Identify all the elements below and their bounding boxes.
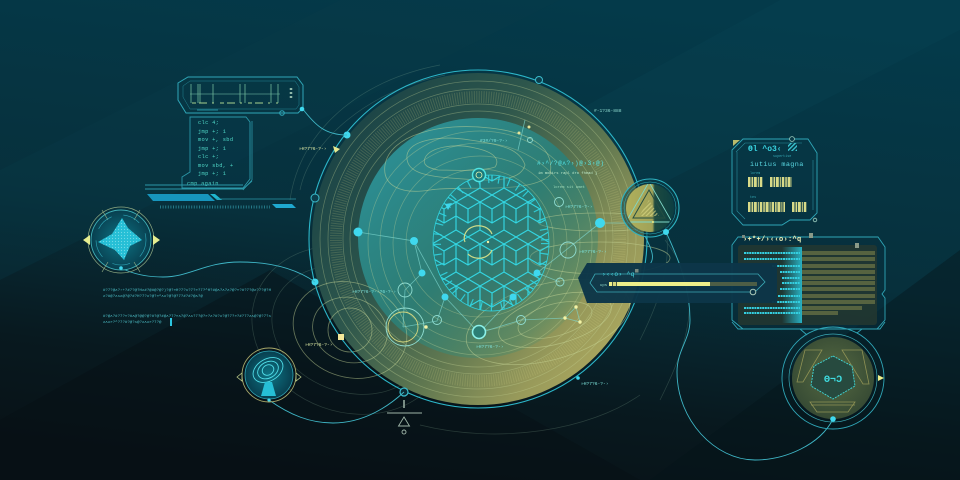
annotation labels on globe: »H?7?6-?-› [299, 146, 327, 152]
panel: barcode card: Ɵl ^o3‹ [748, 145, 782, 154]
annotation labels on globe: #›^/?@ʌ?›)@›3›@) [537, 160, 604, 167]
text block: left description: #?@ʌ?#?7?»?#ʌ@?@@?@?#?@?#@ʌ?7?»ʌ?@?ʌʌ?7?@?»?ʌ?#?ʌ?@?7?»?#?7?ʌʌ@?@?7?ʌ [103, 314, 272, 319]
contour blobs [279, 127, 670, 394]
text block: left description: ʌʌʌ»?^?7?#?@?ʌ@?ʌʌʌ»?7?@ [103, 320, 162, 325]
icon: hex badge dial: Θ¬Ɔ [824, 375, 842, 386]
code text: clc 4; [198, 120, 219, 126]
annotation labels on globe: »H?7?6-?-›?6-?-› [352, 289, 396, 295]
panel: status progress bar: ups [600, 284, 608, 288]
bar code chart [191, 84, 278, 110]
panel: barcode card [732, 137, 817, 225]
code text: clc +; [198, 154, 219, 160]
panel: top-left data chart [178, 77, 304, 115]
annotation labels on globe: lorem sit amet [553, 185, 585, 190]
annotation labels on globe: #3#/?9-?-› [480, 138, 508, 144]
code text: jmp +; 1 [198, 146, 226, 152]
ring nodes [311, 76, 580, 396]
network links [358, 120, 650, 333]
icon: radar dish gauge [237, 348, 301, 402]
outer contour lines behind the globe [228, 65, 689, 441]
panel: status progress bar [578, 263, 777, 303]
outer cyan ring [309, 70, 647, 408]
panel: barcode card: tes [750, 196, 756, 200]
code text: mov sbd, + [198, 163, 233, 169]
text block: left description [103, 288, 272, 326]
connector curves [121, 108, 833, 460]
icon: wireframe diamond gauge [83, 207, 160, 273]
text block: left description: #?7?@ʌ?›+?#7?@?Hʌ#?@#@?@?)?@?»H?7?ʌ?7?»?7?^H?#@ʌ?ʌ?ʌ?@?»?#?7?@ʌ?7?@?H [103, 288, 272, 293]
ridge hatch ring [336, 97, 620, 381]
cyan rows [744, 253, 800, 313]
panel: code listing [182, 117, 252, 190]
progress fill [617, 282, 710, 286]
panel: barcode card: lorem [750, 171, 760, 176]
code text: cmp again [187, 181, 219, 187]
progress track [609, 282, 757, 286]
panel: status progress bar: ›‹‹o› ^q [602, 271, 635, 278]
panel: data stream: ›+*+/›‹‹o›:^q [743, 235, 802, 244]
annotation labels on globe: #-1?36-888 [594, 108, 622, 114]
triangle badge [621, 179, 679, 237]
annotation labels on globe: »H?7?6-?-› [581, 381, 609, 387]
annotation labels on globe: »H?7?6-?-› [476, 344, 504, 350]
annotation labels on globe: »H?7?6-?-› [579, 249, 607, 255]
annotation labels on globe [299, 108, 622, 387]
olive rows [802, 251, 875, 315]
geodesic sphere [433, 175, 549, 311]
code text: jmp +; 1 [198, 171, 226, 177]
code text [187, 120, 233, 187]
icon: hex badge dial [732, 322, 885, 429]
barcodes [748, 182, 807, 207]
progress stripes under code panel [145, 181, 296, 208]
main globe disc [312, 73, 644, 405]
text block: left description: ʌ?#@?ʌʌʌ@?@?#?H?7?ʌ?@?»^ʌʌ?@?@?7?#?#?@ʌ?@ [103, 294, 203, 299]
panel: barcode card: supertise [773, 154, 791, 159]
inner teal core [358, 118, 598, 358]
network nodes [354, 126, 605, 346]
code text: mov +, sbd [198, 137, 233, 143]
panel: barcode card: iutius magna [750, 161, 804, 169]
panel: data stream [732, 233, 885, 329]
balance marker below globe [387, 400, 422, 434]
annotation labels on globe: im mobirs rapl dro fhead } [538, 171, 597, 176]
annotation labels on globe: »H?7?6-?-› [305, 342, 333, 348]
code text: jmp +; 1 [198, 129, 226, 135]
concentric contour rings [320, 81, 636, 397]
annotation labels on globe: »H?7?6-?-› [565, 204, 593, 210]
